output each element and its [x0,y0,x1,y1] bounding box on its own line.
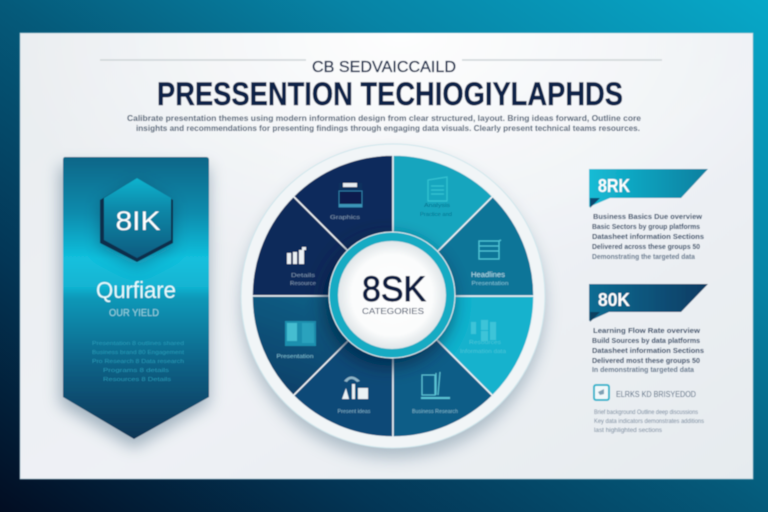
wedge: right lower [393,296,534,396]
wedge: top left [293,155,393,296]
heading: PRESSENTION TECHIOGIYLAPHDS [157,76,623,112]
wedge: top right [393,155,493,296]
text block: stat one copy: Demonstrating the targeted data [592,252,696,261]
icon: open book [285,321,316,346]
text block: stat two copy: Learning Flow Rate overview [593,326,700,335]
wedge: right upper: Headlines [471,272,506,279]
text block: stat one copy: Basic Sectors by group platforms [592,222,700,231]
text block: ribbon body: Programs 8 details [103,368,169,374]
center hub: CATEGORIES [362,307,424,316]
icon: chart columns [287,247,306,264]
icon: document [428,177,447,201]
text block: ribbon body: Resources 8 Details [103,377,171,383]
wedge: bottom left [293,296,393,437]
text block: ribbon body [92,341,185,383]
wedge: left lower [252,296,393,396]
icon: building [342,376,368,399]
panel: right column note: Key data indicators demonstrates additions [594,418,705,425]
wedge: top right: Practice and [420,212,452,218]
text block: stat one copy: Business Basics Due overview [593,212,702,221]
wedge: bottom right [393,296,493,437]
icon: monitor [339,183,362,207]
icon: blocks [471,320,496,341]
heading: CB SEDVAICCAILD [312,59,456,76]
panel: right column note [594,385,705,434]
text block: stat two copy: Build Sources by data platforms [592,336,700,345]
text block: intro: Calibrate presentation themes using modern information design from clear structured, layout. Bring ideas forward, Outline core [127,113,641,123]
text block: ribbon body: Pro Research 8 Data research [92,359,184,365]
panel: right column stat one [589,169,708,261]
text block: ribbon body: Presentation 8 outlines shared [92,341,184,347]
text block: stat one copy: Delivered across these groups 50 [592,242,700,251]
text block: stat one copy [592,212,704,261]
icon: printer [479,240,501,259]
wedge: left upper: Resource [290,281,316,287]
wedge: left upper [252,196,393,296]
text block: stat two copy: Datasheet information Sections [592,346,704,355]
wedge: right upper: Presentation [472,281,508,287]
chart: segmented wheel [241,144,545,458]
text block: intro [127,113,641,133]
icon: device [421,372,450,398]
center hub [322,232,455,368]
text block: stat two copy [592,326,704,374]
wedge: top left: Graphics [330,215,360,221]
text block: stat two copy: In demonstrating targeted data [592,365,695,374]
text block: stat one copy: Datasheet information Sections [592,232,704,241]
panel: left ribbon [60,157,209,448]
text: ribbon subtitle: OUR YIELD [109,307,159,319]
wedge: left lower: Presentation [276,354,314,360]
wedge: bottom left: Present ideas [338,409,371,415]
panel: right column note: Brief background Outline deep discussions [594,409,699,416]
wedge: top right: Analysis [424,203,450,209]
tag: 80K: 80K [598,290,630,310]
text block: stat two copy: Delivered most these groups 50 [592,356,700,365]
heading [100,59,662,112]
icon: hexagon badge [100,178,173,266]
text: ribbon title: Qurfiare [96,277,176,303]
wedge: right lower: Information data [460,349,507,355]
panel: right column note: last highlighted sections [594,427,663,434]
icon: chat badge [594,385,609,400]
center hub: 8SK [362,270,426,309]
panel: right column stat two [589,284,708,374]
wedge: right lower: Resources [469,340,501,346]
tag: 8RK: 8RK [598,176,630,196]
text block: ribbon body: Business brand 80 Engagement [92,350,185,356]
wedge: right upper [393,196,534,296]
panel: right column note: ELRKS KD BRISYEDOD [616,390,696,399]
wedge: bottom right: Business Research [412,409,458,415]
wedge: left upper: Details [291,273,315,279]
icon: hexagon badge: 8IK [116,206,160,236]
text block: intro: insights and recommendations for presenting findings through engaging data visuals. Clearly present technical teams resources. [136,123,640,133]
